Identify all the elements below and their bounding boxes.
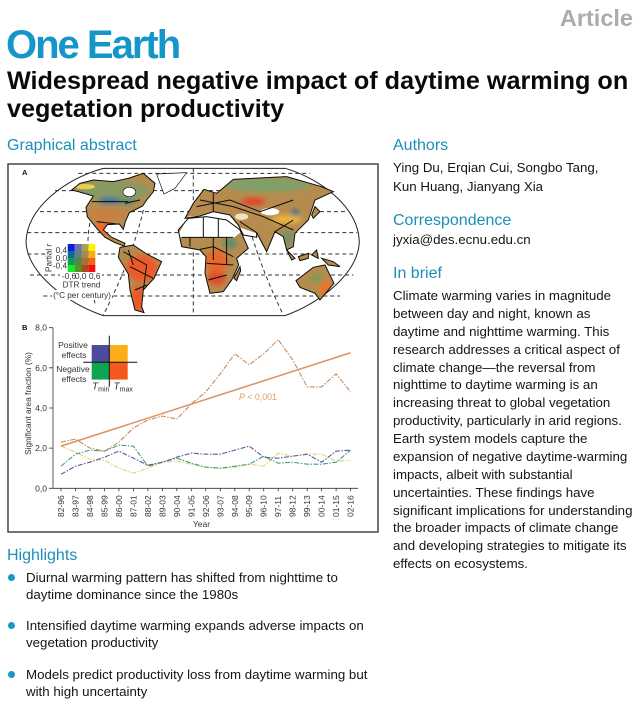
panel letter B: B — [22, 323, 28, 332]
highlight 2: Intensified daytime warming expands adverse impacts on — [26, 618, 364, 633]
in brief paragraph: uncertainties. These findings have — [393, 485, 595, 500]
heading: authors: Authors — [393, 137, 448, 154]
in brief paragraph: impacts, albeit with substantial — [393, 467, 573, 482]
greenland outline — [157, 173, 187, 194]
x tick labels: 83-97 — [70, 495, 80, 517]
x tick labels: 91-05 — [186, 495, 196, 517]
quadrant inset — [56, 336, 137, 394]
panel B: line chart — [23, 323, 358, 529]
colour legend: -0,4 — [53, 262, 67, 270]
highlight 1: Diurnal warming pattern has shifted from nighttime to — [26, 570, 338, 585]
y tick labels: 4,0 — [35, 403, 47, 413]
in brief paragraph: between day and night, known as — [393, 306, 590, 321]
x tick labels: 90-04 — [172, 495, 182, 517]
y tick labels: 6,0 — [35, 363, 47, 373]
quadrant inset: effects — [62, 374, 86, 384]
quadrant inset: max — [120, 386, 133, 394]
in brief paragraph: productivity, particularly in arid regions. — [393, 413, 622, 428]
y tick labels: 2,0 — [35, 443, 47, 453]
p value: P < 0,001 — [239, 392, 277, 402]
y axis title: Significant area fraction (%) — [23, 352, 33, 455]
highlight 2: vegetation productivity — [26, 635, 158, 650]
series: yellow — [61, 446, 351, 473]
x tick labels: 94-08 — [230, 495, 240, 517]
legend label backing — [47, 241, 67, 274]
map outline — [26, 168, 359, 316]
x tick labels: 84-98 — [85, 495, 95, 517]
article label: Article — [560, 5, 633, 31]
in brief paragraph: climate change—the reversal from — [393, 360, 596, 374]
quadrant inset: Negative — [56, 364, 90, 374]
article title: Widespread negative impact of daytime warming on — [7, 67, 628, 95]
in brief paragraph: increasing threat to global vegetation — [393, 395, 610, 410]
colour legend: Partial r — [44, 244, 54, 272]
y tick labels — [35, 323, 47, 493]
highlight 3 — [8, 667, 368, 699]
series: purple — [61, 446, 351, 474]
heading: in brief: In brief — [393, 265, 442, 282]
quadrant inset: min — [98, 386, 109, 394]
y tick labels: 8,0 — [35, 323, 47, 333]
x tick labels: 01-15 — [331, 495, 341, 517]
article title — [7, 67, 628, 123]
colour legend: -0,6 — [62, 272, 77, 281]
x tick labels: 98-12 — [288, 495, 298, 517]
x tick labels: 97-11 — [273, 496, 283, 517]
land colour fields — [67, 170, 343, 317]
authors list: Ying Du, Erqian Cui, Songbo Tang, — [393, 160, 598, 175]
quadrant inset: T — [114, 382, 120, 392]
y tick labels: 0,0 — [35, 483, 47, 493]
colour legend: 0,0 — [56, 254, 67, 263]
colour legend: (°C per century) — [53, 291, 111, 300]
in brief paragraph — [393, 288, 632, 571]
panel A: world map — [26, 168, 359, 317]
x tick labels: 85-99 — [99, 495, 109, 517]
in brief paragraph: the broader impacts of climate change — [393, 520, 618, 535]
country borders — [72, 173, 340, 313]
quadrant inset: T — [92, 382, 99, 392]
highlight 3: with high uncertainty — [26, 684, 147, 699]
series: green — [61, 445, 351, 468]
colour legend: 0,0 — [75, 272, 87, 281]
x tick labels: 88-02 — [143, 495, 153, 517]
in brief paragraph: Climate warming varies in magnitude — [393, 288, 611, 303]
x tick labels: 99-13 — [302, 495, 312, 517]
in brief paragraph: daytime and nighttime warming. This — [393, 324, 609, 339]
x tick labels — [56, 495, 356, 517]
colour legend: 0,4 — [56, 246, 67, 255]
data series — [61, 340, 351, 474]
authors list — [393, 160, 598, 194]
x tick labels: 02-16 — [346, 495, 356, 517]
quadrant inset: effects — [62, 350, 86, 360]
series: orange — [61, 340, 351, 451]
highlight 3: Models predict productivity loss from daytime warming but — [26, 667, 367, 682]
authors list: Kun Huang, Jianyang Xia — [393, 178, 543, 194]
x tick labels: 93-07 — [215, 495, 225, 517]
axes — [49, 328, 358, 491]
x tick labels: 92-06 — [201, 495, 211, 517]
journal title: One Earth — [6, 23, 179, 67]
trend line — [61, 353, 351, 446]
x tick labels: 87-01 — [128, 495, 138, 517]
in brief paragraph: significant implications for understanding — [393, 502, 632, 518]
in brief paragraph: research addresses a critical aspect of — [393, 342, 620, 357]
colour legend: 0,6 — [89, 272, 101, 281]
in brief paragraph: nighttime to daytime warming is an — [393, 377, 598, 392]
highlight 1: daytime dominance since the 1980s — [26, 587, 238, 602]
map graticule — [27, 168, 357, 316]
graphical abstract figure — [7, 163, 379, 533]
colour legend — [44, 241, 112, 300]
hudson bay — [123, 187, 136, 197]
heading: highlights: Highlights — [7, 547, 77, 564]
x tick labels: 95-09 — [244, 495, 254, 517]
x tick labels: 96-10 — [259, 495, 269, 517]
x tick labels: 00-14 — [317, 495, 327, 517]
in brief paragraph: expansion of negative daytime-warming — [393, 449, 627, 464]
highlight 2 — [8, 618, 364, 650]
colour legend: DTR trend — [63, 280, 101, 290]
in brief paragraph: and developing strategies to mitigate its — [393, 538, 627, 553]
panel letter A: A — [22, 168, 28, 177]
x tick labels: 82-96 — [56, 495, 66, 517]
x axis title: Year — [193, 519, 210, 529]
heading: graphical abstract: Graphical abstract — [7, 137, 137, 154]
quadrant inset: Positive — [58, 340, 88, 350]
heading: correspondence: Correspondence — [393, 212, 511, 229]
in brief paragraph: effects on ecosystems. — [393, 556, 528, 571]
x tick labels: 86-00 — [114, 495, 124, 517]
highlight 1 — [8, 570, 338, 602]
correspondence email: jyxia@des.ecnu.edu.cn — [393, 232, 531, 247]
x tick labels: 89-03 — [157, 495, 167, 517]
panel frame — [8, 164, 378, 532]
article title: vegetation productivity — [7, 95, 284, 123]
in brief paragraph: Earth system models capture the — [393, 431, 587, 446]
